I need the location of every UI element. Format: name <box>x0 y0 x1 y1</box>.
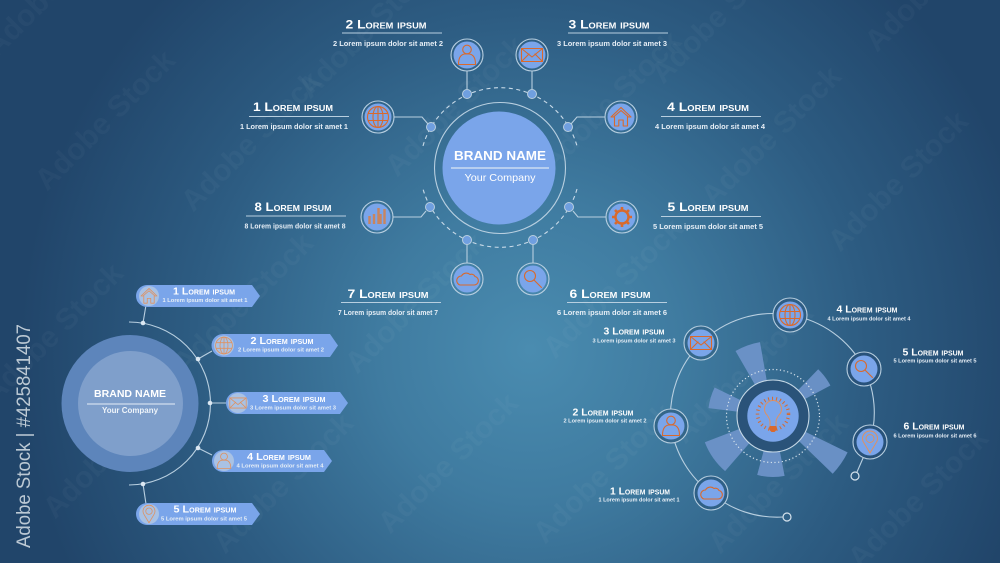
outer circle <box>62 335 198 472</box>
label 4: 4 Lorem ipsum dolor sit amet 4 <box>655 122 766 131</box>
radial wedges <box>705 342 848 477</box>
label 2: 2 Lorem ipsum <box>346 18 427 32</box>
icon: bar chart 8 <box>361 201 393 233</box>
label 6 <box>894 420 976 440</box>
label 3 <box>592 326 676 344</box>
dashed ring <box>423 88 577 247</box>
label 7: 7 Lorem ipsum dolor sit amet 7 <box>338 308 438 317</box>
pill 2 <box>212 334 338 357</box>
label 5: 5 Lorem ipsum dolor sit amet 5 <box>894 358 976 364</box>
icon: magnifier 5 <box>847 352 881 386</box>
pill 1: 1 Lorem ipsum dolor sit amet 1 <box>162 298 248 304</box>
label 3: 3 Lorem ipsum dolor sit amet 3 <box>592 338 676 344</box>
inner brand circle: BRAND NAME <box>94 388 166 400</box>
pill 5 <box>136 503 260 525</box>
icon: magnifier 6 <box>517 263 549 295</box>
label 4 <box>828 304 911 322</box>
watermarks: Adobe Stock <box>667 297 820 450</box>
label 5 <box>894 346 976 364</box>
label 1: 1 Lorem ipsum <box>610 486 670 498</box>
icon: mail 3 <box>684 326 718 360</box>
label 4: 4 Lorem ipsum <box>836 304 898 316</box>
label 1 <box>240 100 349 131</box>
label 1 <box>598 486 680 504</box>
central brand circle: Your Company <box>464 172 536 184</box>
icon: mail 3 <box>516 39 548 71</box>
label 3: 3 Lorem ipsum dolor sit amet 3 <box>557 39 667 48</box>
connectors <box>393 71 606 263</box>
watermarks: Adobe Stock <box>537 212 690 365</box>
pill 5: 5 Lorem ipsum dolor sit amet 5 <box>161 516 247 522</box>
watermarks: Adobe Stock <box>167 227 320 380</box>
pill 1 <box>136 285 260 307</box>
label 3 <box>557 18 668 48</box>
label 6: 6 Lorem ipsum dolor sit amet 6 <box>894 434 976 440</box>
pill 4: 4 Lorem ipsum dolor sit amet 4 <box>236 464 325 470</box>
vertical stock id: Adobe Stock | #425841407 <box>14 324 35 548</box>
orbit end circles <box>783 472 859 521</box>
pill 3: 3 Lorem ipsum dolor sit amet 3 <box>250 406 336 412</box>
label 5 <box>653 200 763 231</box>
pill 3: 3 Lorem ipsum <box>262 393 326 405</box>
label 8 <box>244 200 346 230</box>
watermarks: Adobe Stock <box>695 60 848 213</box>
icon: house 4 <box>605 101 637 133</box>
icon: person 2 <box>654 409 688 443</box>
label 5: 5 Lorem ipsum dolor sit amet 5 <box>653 222 763 231</box>
label 5: 5 Lorem ipsum <box>902 346 964 358</box>
watermarks: Adobe Stock <box>339 227 492 380</box>
label 4: 4 Lorem ipsum dolor sit amet 4 <box>828 316 911 322</box>
inner brand circle <box>78 351 183 456</box>
watermarks: Adobe Stock <box>372 387 525 540</box>
outer ring <box>434 102 566 234</box>
label 6: 6 Lorem ipsum <box>570 287 651 301</box>
central brand circle: BRAND NAME <box>454 148 546 163</box>
label 1: 1 Lorem ipsum dolor sit amet 1 <box>240 122 348 131</box>
arc <box>129 322 210 485</box>
label 2 <box>333 18 443 48</box>
icon: globe 1 <box>362 101 394 133</box>
watermarks: Adobe Stock <box>535 25 688 178</box>
pill 2: 2 Lorem ipsum <box>250 335 314 347</box>
node dots <box>426 90 574 244</box>
watermarks: Adobe Stock <box>527 397 680 550</box>
watermarks: Adobe Stock <box>702 407 855 560</box>
pill 4: 4 Lorem ipsum <box>247 451 311 463</box>
panel: left brand diagram <box>62 285 348 525</box>
label 4 <box>655 100 766 131</box>
inner brand circle: Your Company <box>102 406 159 415</box>
label 2: 2 Lorem ipsum <box>572 406 634 418</box>
label 8: 8 Lorem ipsum dolor sit amet 8 <box>244 222 346 230</box>
icon: cloud 1 <box>694 476 728 510</box>
label 7 <box>338 287 441 317</box>
icon: pin 6 <box>853 425 887 459</box>
icon: cloud 7 <box>451 263 483 295</box>
label 2: 2 Lorem ipsum dolor sit amet 2 <box>564 418 646 424</box>
label 2: 2 Lorem ipsum dolor sit amet 2 <box>333 39 443 48</box>
label 7: 7 Lorem ipsum <box>348 287 429 301</box>
label 6: 6 Lorem ipsum <box>904 420 965 432</box>
orbit line <box>670 314 874 517</box>
pill 1: 1 Lorem ipsum <box>173 286 235 298</box>
label 2 <box>564 406 646 424</box>
icon: gear 5 <box>606 201 638 233</box>
dotted ring <box>726 370 820 462</box>
connectors <box>143 305 226 504</box>
watermarks: Adobe Stock <box>175 65 328 218</box>
label 8: 8 Lorem ipsum <box>254 200 332 214</box>
watermarks: Adobe Stock <box>379 30 532 183</box>
icon: person 2 <box>451 39 483 71</box>
central brand circle <box>442 112 556 224</box>
panel: top radial diagram <box>240 18 766 317</box>
label 1: 1 Lorem ipsum <box>253 100 333 114</box>
watermarks: Adobe Stock <box>37 372 190 525</box>
pill 5: 5 Lorem ipsum <box>174 504 237 516</box>
watermarks: Adobe Stock <box>29 44 182 197</box>
watermarks: Adobe Stock <box>822 105 975 258</box>
watermarks: Adobe Stock <box>207 407 360 560</box>
pill 2: 2 Lorem ipsum dolor sit amet 2 <box>238 348 324 354</box>
label 1: 1 Lorem ipsum dolor sit amet 1 <box>598 498 680 504</box>
arc dots <box>141 321 212 486</box>
label 5: 5 Lorem ipsum <box>668 200 749 214</box>
center hub with bulb <box>737 380 809 452</box>
pill 3 <box>226 392 348 414</box>
pill 4 <box>212 450 332 472</box>
label 6 <box>557 287 667 317</box>
label 3: 3 Lorem ipsum <box>604 326 665 338</box>
label 6: 6 Lorem ipsum dolor sit amet 6 <box>557 308 667 317</box>
icon: globe 4 <box>773 298 807 332</box>
label 3: 3 Lorem ipsum <box>568 18 650 32</box>
panel: right orbit diagram <box>564 298 976 521</box>
label 4: 4 Lorem ipsum <box>667 100 749 114</box>
